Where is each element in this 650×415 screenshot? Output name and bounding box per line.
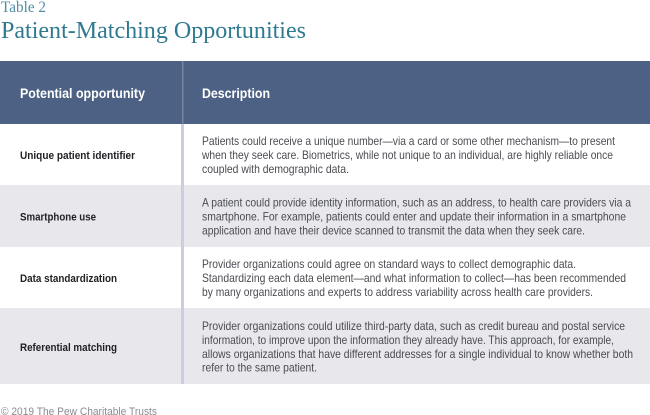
- row description: [201, 135, 616, 176]
- row label: Smartphone use: [20, 212, 96, 224]
- row description: [202, 320, 633, 374]
- title: Patient-Matching Opportunities: [1, 17, 306, 44]
- row: referential matching: [0, 308, 650, 384]
- row description: Provider organizations could agree on standard ways to collect demographic data.: [202, 258, 576, 271]
- row label: Unique patient identifier: [20, 150, 136, 162]
- row label: Referential matching: [20, 342, 117, 354]
- row description: coupled with demographic data.: [202, 163, 349, 176]
- row description: refer to the same patient.: [202, 362, 317, 374]
- table header row: [0, 61, 650, 124]
- row: data standardization: [0, 247, 650, 308]
- row description: [202, 196, 631, 238]
- row description: application and have their device scanned to transmit the data when they seek care.: [202, 224, 585, 238]
- row: unique patient identifier: [0, 124, 650, 185]
- row description: by many organizations and experts to address variability across health care providers.: [202, 286, 593, 299]
- row: smartphone use: [0, 185, 650, 247]
- row description: [202, 258, 626, 299]
- row label: Data standardization: [20, 273, 117, 285]
- header: description: Description: [202, 86, 270, 101]
- table: [0, 61, 650, 384]
- header: potential opportunity: Potential opportunity: [20, 86, 145, 101]
